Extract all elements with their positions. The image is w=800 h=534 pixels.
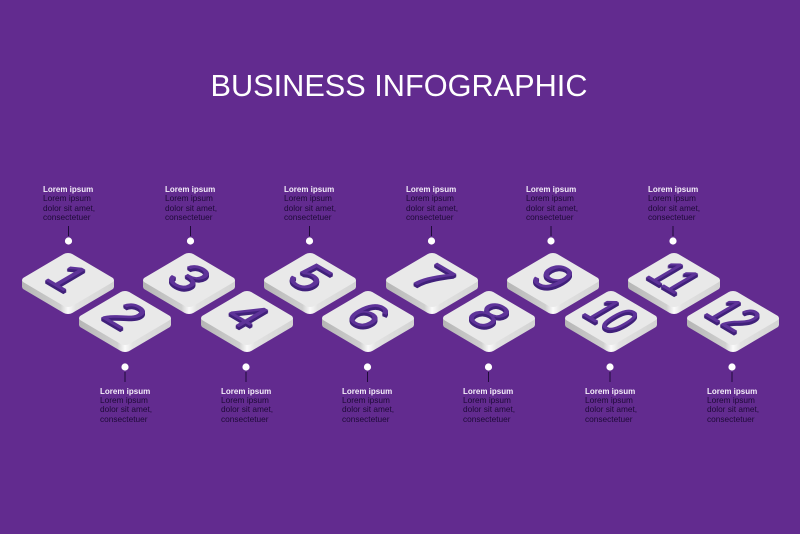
callout 10 [585,363,637,424]
dot 12 [728,363,736,371]
label text 11: dolor sit amet, [648,203,700,213]
label text 3: consectetuer [165,212,213,222]
label text 7: consectetuer [406,212,454,222]
label text 1: Lorem ipsum [43,185,93,194]
tile 12 [685,290,781,353]
step 8 [441,290,537,353]
dot 4 [242,363,250,371]
label text 12: Lorem ipsum [707,387,757,396]
number 6: 6 [332,294,403,336]
dot 8 [485,363,492,371]
tile 6 [320,290,416,353]
connector 7 [430,226,432,236]
dot 3 [187,237,194,245]
label text 2: dolor sit amet, [100,404,152,414]
tile 3 [141,252,237,315]
connector 3 [190,226,192,236]
callout 6 [342,363,394,424]
step 6 [320,290,416,353]
label text 8: Lorem ipsum [463,395,511,405]
step 1 [20,252,116,315]
connector 5 [308,226,310,236]
tile 4 [199,290,295,353]
number 1: 1 [32,256,103,298]
callout 2 [100,363,152,424]
label text 7: Lorem ipsum [406,185,456,194]
callout 8 [463,363,515,424]
dot 7 [428,237,435,245]
number 9: 9 [517,256,588,298]
label text 1: consectetuer [43,212,91,222]
connector 2 [124,372,126,382]
label text 6: dolor sit amet, [342,404,394,414]
dot 11 [669,237,677,245]
label text 1: dolor sit amet, [43,203,95,213]
label text 1: Lorem ipsum [43,193,91,203]
connector 11 [672,226,674,236]
connector 6 [366,372,368,382]
label text 8: Lorem ipsum [463,387,513,396]
callout 5 [284,185,336,245]
label text 11: Lorem ipsum [648,185,698,194]
tile 11 [626,252,722,315]
label text 6: Lorem ipsum [342,395,390,405]
callout 3 [165,185,217,245]
label text 12: Lorem ipsum [707,395,755,405]
step 7 [384,252,480,315]
callout 4 [221,363,273,424]
label text 5: Lorem ipsum [284,185,334,194]
number 5: 5 [274,256,345,298]
tile 7 [384,252,480,315]
tile 1 [20,252,116,315]
label text 4: dolor sit amet, [221,404,273,414]
dot 9 [547,237,555,245]
number 8: 8 [453,294,524,336]
step 2 [77,290,173,353]
step 4 [199,290,295,353]
title: BUSINESS INFOGRAPHIC [210,68,588,103]
tile 5 [262,252,358,315]
connector 8 [488,372,490,382]
number 3: 3 [153,256,224,298]
number 2: 2 [89,294,160,336]
step 10 [563,290,659,353]
label text 2: consectetuer [100,414,148,424]
number 12: 12 [692,291,773,339]
label text 2: Lorem ipsum [100,395,148,405]
label text 6: consectetuer [342,414,390,424]
step 9 [505,252,601,315]
dot 1 [65,237,72,245]
label text 10: Lorem ipsum [585,387,635,396]
number 11: 11 [634,254,714,301]
callout 11 [648,185,700,245]
dot 6 [364,363,371,371]
connector 12 [731,372,733,382]
label text 9: dolor sit amet, [526,203,578,213]
callout 9 [526,185,578,245]
label text 4: Lorem ipsum [221,395,269,405]
label text 11: Lorem ipsum [648,193,696,203]
label text 9: Lorem ipsum [526,185,576,194]
label text 8: dolor sit amet, [463,404,515,414]
label text 9: consectetuer [526,212,574,222]
connector 4 [245,372,247,382]
label text 3: Lorem ipsum [165,193,213,203]
callout 1 [43,185,95,245]
step 5 [262,252,358,315]
label text 5: dolor sit amet, [284,203,336,213]
label text 8: consectetuer [463,414,511,424]
callout 12 [707,363,759,424]
dot 10 [606,363,614,371]
number 4: 4 [211,294,282,336]
tile 10 [563,290,659,353]
label text 7: Lorem ipsum [406,193,454,203]
step 12 [685,290,781,353]
label text 9: Lorem ipsum [526,193,574,203]
label text 3: Lorem ipsum [165,185,215,194]
dot 5 [306,237,313,245]
connector 10 [609,372,611,382]
label text 6: Lorem ipsum [342,387,392,396]
label text 4: Lorem ipsum [221,387,271,396]
label text 12: dolor sit amet, [707,404,759,414]
step 3 [141,252,237,315]
label text 7: dolor sit amet, [406,203,458,213]
label text 10: dolor sit amet, [585,404,637,414]
connector 1 [68,226,70,236]
label text 2: Lorem ipsum [100,387,150,396]
label text 11: consectetuer [648,212,696,222]
label text 10: consectetuer [585,414,633,424]
label text 12: consectetuer [707,414,755,424]
callout 7 [406,185,458,245]
label text 3: dolor sit amet, [165,203,217,213]
dot 2 [121,363,129,371]
step 11 [626,252,722,315]
tile 9 [505,252,601,315]
number 10: 10 [570,291,651,339]
label text 5: consectetuer [284,212,332,222]
label text 5: Lorem ipsum [284,193,332,203]
number 7: 7 [396,256,467,298]
connector 9 [550,226,552,236]
tile 8 [441,290,537,353]
tile 2 [77,290,173,353]
label text 10: Lorem ipsum [585,395,633,405]
label text 4: consectetuer [221,414,269,424]
